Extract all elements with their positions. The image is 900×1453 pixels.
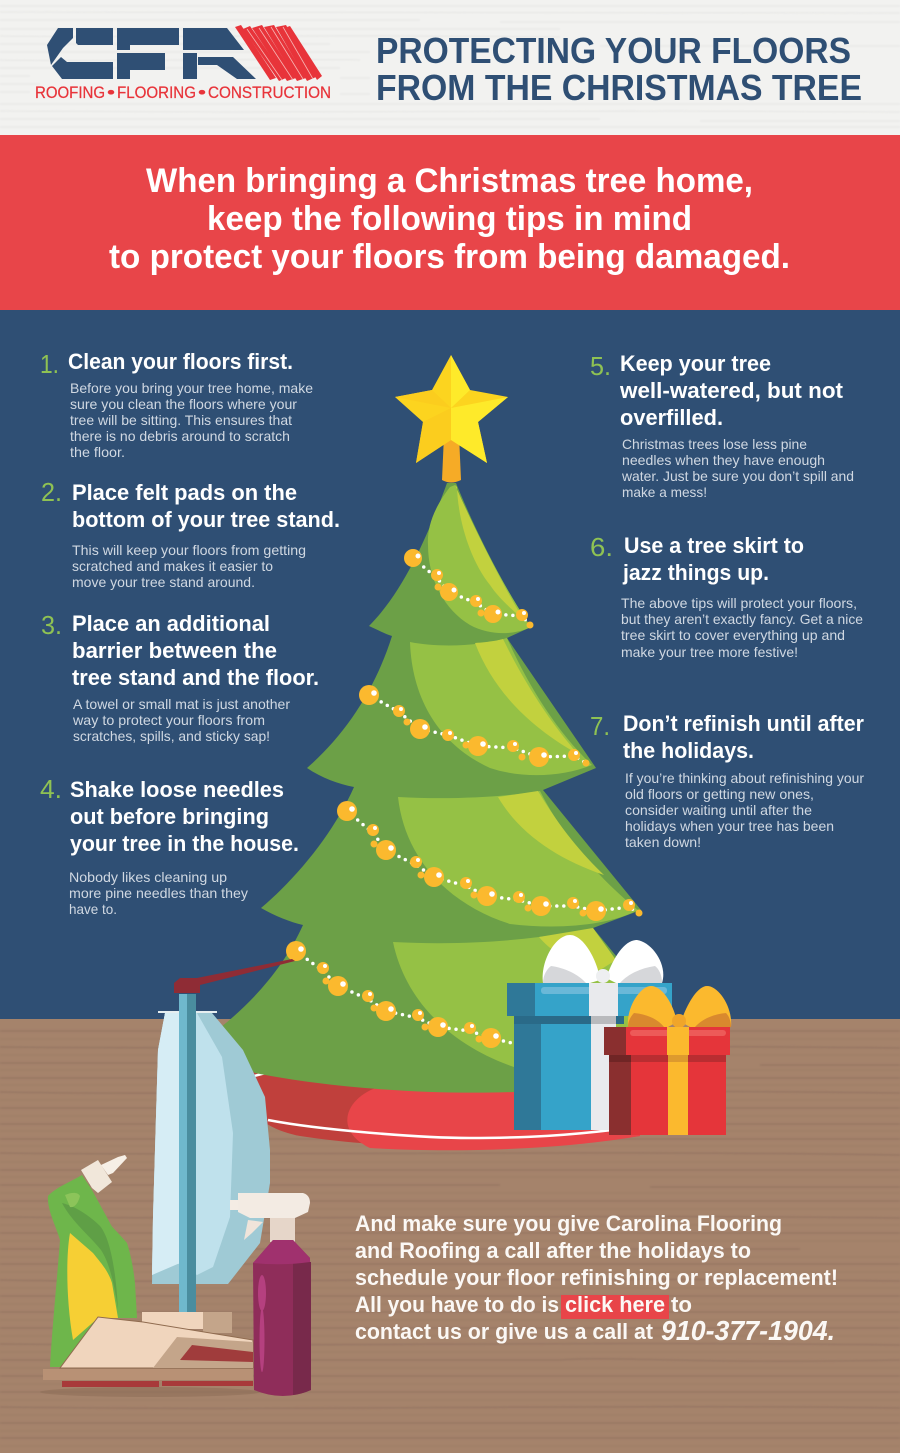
tip 2 body: This will keep your floors from getting: [72, 542, 306, 558]
tip 4: [40, 774, 299, 917]
tip 1 body: there is no debris around to scratch: [70, 428, 290, 444]
intro text: keep the following tips in mind: [207, 200, 692, 238]
tip 4 body: [69, 869, 248, 917]
tree second tier highlight: [475, 639, 578, 754]
vacuum handle: [174, 959, 295, 993]
tree skirt: [248, 1071, 640, 1150]
tip 3: 3.: [41, 610, 62, 640]
tip 5 heading: well-watered, but not: [619, 378, 844, 403]
tip 2 body: [72, 542, 306, 590]
tip 7 body: old floors or getting new ones,: [625, 786, 814, 802]
christmas tree: [221, 483, 641, 1093]
intro text: [109, 162, 790, 276]
tip 7 body: consider waiting until after the: [625, 802, 812, 818]
vacuum base block: [142, 1312, 203, 1329]
tip 6 heading: jazz things up.: [622, 560, 769, 585]
tip 5 body: needles when they have enough: [622, 452, 825, 468]
tip 7 body: [625, 770, 864, 850]
tip 3 heading: barrier between the: [72, 638, 277, 663]
logo tagline: FLOORING: [117, 84, 196, 102]
tip 1 body: tree will be sitting. This ensures that: [70, 412, 292, 428]
green bottle: [48, 1155, 137, 1367]
call to action: contact us or give us a call at: [355, 1319, 654, 1344]
wood floor: [0, 1019, 900, 1453]
navy background panel: [0, 310, 900, 1019]
tip 3 body: [72, 696, 290, 744]
tip 1: 1.: [40, 349, 59, 379]
tip 2 heading: [72, 480, 340, 532]
logo tagline: •: [107, 84, 115, 102]
logo tagline: CONSTRUCTION: [208, 84, 331, 102]
tip 4 body: more pine needles than they: [69, 885, 248, 901]
logo: [35, 25, 331, 102]
logo tagline: •: [198, 84, 206, 102]
tip 5 body: make a mess!: [622, 484, 707, 500]
click here highlight: click here: [565, 1292, 665, 1317]
tree third tier highlight: [498, 791, 604, 875]
logo tagline: [35, 84, 331, 102]
tip 1 heading: Clean your floors first.: [68, 349, 293, 374]
logo letter F: [117, 28, 179, 79]
tip 5: [590, 351, 854, 500]
tip 7: 7.: [590, 711, 610, 741]
tip 5 heading: Keep your tree: [620, 351, 771, 376]
tree top tier light: [428, 485, 531, 633]
call to action: to: [671, 1292, 692, 1317]
header wood background: [0, 0, 900, 135]
vacuum foot: [40, 1317, 260, 1397]
tip 4 body: Nobody likes cleaning up: [69, 869, 227, 885]
call to action: schedule your floor refinishing or replacement!: [355, 1265, 838, 1290]
intro text: to protect your floors from being damaged.: [109, 238, 790, 276]
intro text: When bringing a Christmas tree home,: [146, 162, 753, 200]
tree silhouette: [221, 483, 641, 1093]
garland third tier: [337, 801, 642, 921]
orange bow: [628, 986, 731, 1028]
tip 6: [590, 532, 863, 660]
title: FROM THE CHRISTMAS TREE: [376, 67, 862, 108]
red gift: [604, 986, 731, 1135]
tip 3 body: A towel or small mat is just another: [73, 696, 290, 712]
tip 6 body: but they aren’t exactly fancy. Get a nice: [621, 611, 863, 627]
tip 7 heading: Don’t refinish until after: [623, 711, 864, 736]
tip 5 heading: overfilled.: [620, 405, 723, 430]
blue gift: [507, 935, 672, 1130]
tip 3 heading: tree stand and the floor.: [72, 665, 319, 690]
vacuum cleaner: [142, 959, 295, 1333]
tip 6 body: [621, 595, 863, 660]
tree top tier highlight: [455, 485, 524, 620]
logo roof stripes: [235, 25, 322, 81]
tip 1 body: [70, 380, 313, 460]
tip 7: [590, 711, 864, 850]
white bow: [543, 935, 663, 983]
tip 2 body: scratched and makes it easier to: [72, 558, 273, 574]
tip 6 body: The above tips will protect your floors,: [621, 595, 857, 611]
call to action: And make sure you give Carolina Flooring: [355, 1211, 782, 1236]
call to action: All you have to do is: [355, 1292, 559, 1317]
tree fourth tier highlight: [539, 928, 616, 970]
star topper: [395, 355, 508, 482]
vacuum pole: [179, 994, 188, 1312]
vacuum bag: [152, 1012, 270, 1284]
tip 7 body: If you’re thinking about refinishing your: [625, 770, 864, 786]
red intro band: [0, 135, 900, 310]
tree second tier light: [410, 638, 592, 775]
garland top tier: [404, 549, 534, 628]
tip 5 body: water. Just be sure you don’t spill and: [621, 468, 854, 484]
tip 6 heading: [622, 533, 804, 585]
tip 4 heading: [70, 777, 299, 856]
tip 4: 4.: [40, 774, 62, 804]
tip 5 body: Christmas trees lose less pine: [622, 436, 807, 452]
tip 4 heading: Shake loose needles: [70, 777, 284, 802]
tip 1 body: sure you clean the floors where your: [70, 396, 297, 412]
tip 7 body: holidays when your tree has been: [625, 818, 834, 834]
logo letter R: [183, 28, 256, 79]
tip 4 heading: your tree in the house.: [70, 831, 299, 856]
logo letter C: [47, 28, 113, 79]
phone number: 910-377-1904.: [661, 1315, 835, 1346]
tip 2 heading: Place felt pads on the: [72, 480, 297, 505]
tip 1 body: the floor.: [70, 444, 125, 460]
call to action: [355, 1211, 838, 1346]
tree fourth tier light: [393, 930, 640, 1075]
tip 6: 6.: [590, 532, 613, 562]
tip 5 body: [621, 436, 854, 500]
tip 4 body: have to.: [69, 901, 117, 917]
tip 3 heading: [72, 611, 319, 690]
tip 7 heading: the holidays.: [623, 738, 754, 763]
tip 7 heading: [623, 711, 864, 763]
tip 1: [40, 349, 313, 460]
tip 4 heading: out before bringing: [70, 804, 269, 829]
tip 6 body: make your tree more festive!: [621, 644, 798, 660]
spray bottle: [230, 1193, 311, 1396]
tip 5 heading: [619, 351, 844, 430]
tip 3 body: way to protect your floors from: [72, 712, 265, 728]
tip 1 body: Before you bring your tree home, make: [70, 380, 313, 396]
tip 6 body: tree skirt to cover everything up and: [621, 627, 845, 643]
tip 5: 5.: [590, 351, 611, 381]
tip 7 body: taken down!: [625, 834, 701, 850]
title: PROTECTING YOUR FLOORS: [376, 30, 851, 71]
tip 3: [41, 610, 319, 744]
tree third tier light: [398, 791, 638, 926]
tip 2: [41, 477, 340, 590]
tip 2 body: move your tree stand around.: [72, 574, 255, 590]
logo tagline: ROOFING: [35, 84, 105, 102]
call to action: and Roofing a call after the holidays to: [355, 1238, 751, 1263]
tip 3 body: scratches, spills, and sticky sap!: [73, 728, 270, 744]
title: [376, 30, 862, 108]
tip 6 heading: Use a tree skirt to: [624, 533, 804, 558]
tip 2: 2.: [41, 477, 62, 507]
tip 3 heading: Place an additional: [72, 611, 270, 636]
garland fourth tier: [286, 941, 512, 1048]
tip 2 heading: bottom of your tree stand.: [72, 507, 340, 532]
garland second tier: [359, 685, 590, 767]
